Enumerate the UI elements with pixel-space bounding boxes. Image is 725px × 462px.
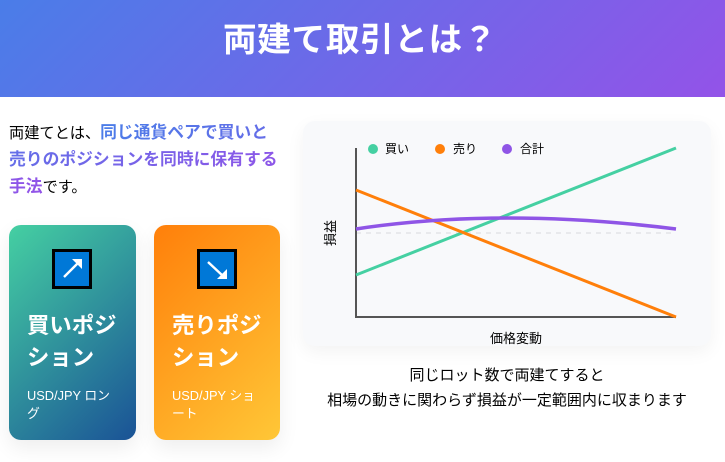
buy subtext <box>27 388 110 421</box>
x axis label: 価格変動 <box>490 331 542 346</box>
card: buy position <box>9 225 136 440</box>
legend: 合計 <box>520 141 544 156</box>
icon: up arrow <box>52 249 92 289</box>
header banner <box>0 0 725 97</box>
hedging line chart <box>323 141 676 346</box>
header banner: 両建て取引とは？ <box>223 22 497 59</box>
sell line <box>356 190 676 317</box>
legend: 買い <box>385 142 409 156</box>
chart caption: 同じロット数で両建てすると <box>409 367 604 384</box>
axes <box>356 148 676 317</box>
card: sell position <box>154 225 280 440</box>
sell subtext: ート <box>172 406 198 421</box>
sell subtext <box>172 388 255 421</box>
legend: 売り <box>453 141 477 156</box>
chart caption: 相場の動きに関わらず損益が一定範囲内に収まります <box>327 392 687 409</box>
total line <box>356 218 676 229</box>
y axis label: 損益 <box>323 220 338 246</box>
sell subtext: USD/JPY ショ <box>172 388 255 403</box>
icon: down arrow <box>197 249 237 289</box>
legend <box>368 141 544 156</box>
buy heading: 買いポジション <box>27 313 117 370</box>
buy subtext: USD/JPY ロン <box>27 388 110 403</box>
chart caption <box>327 367 687 409</box>
buy line <box>356 148 676 275</box>
buy subtext: グ <box>27 406 40 421</box>
sell heading: 売りポジション <box>172 313 262 370</box>
panel: chart <box>303 121 711 346</box>
intro text: 両建てとは、同じ通貨ペアで買いと売りのポジションを同時に保有する手法です。 <box>9 123 278 196</box>
